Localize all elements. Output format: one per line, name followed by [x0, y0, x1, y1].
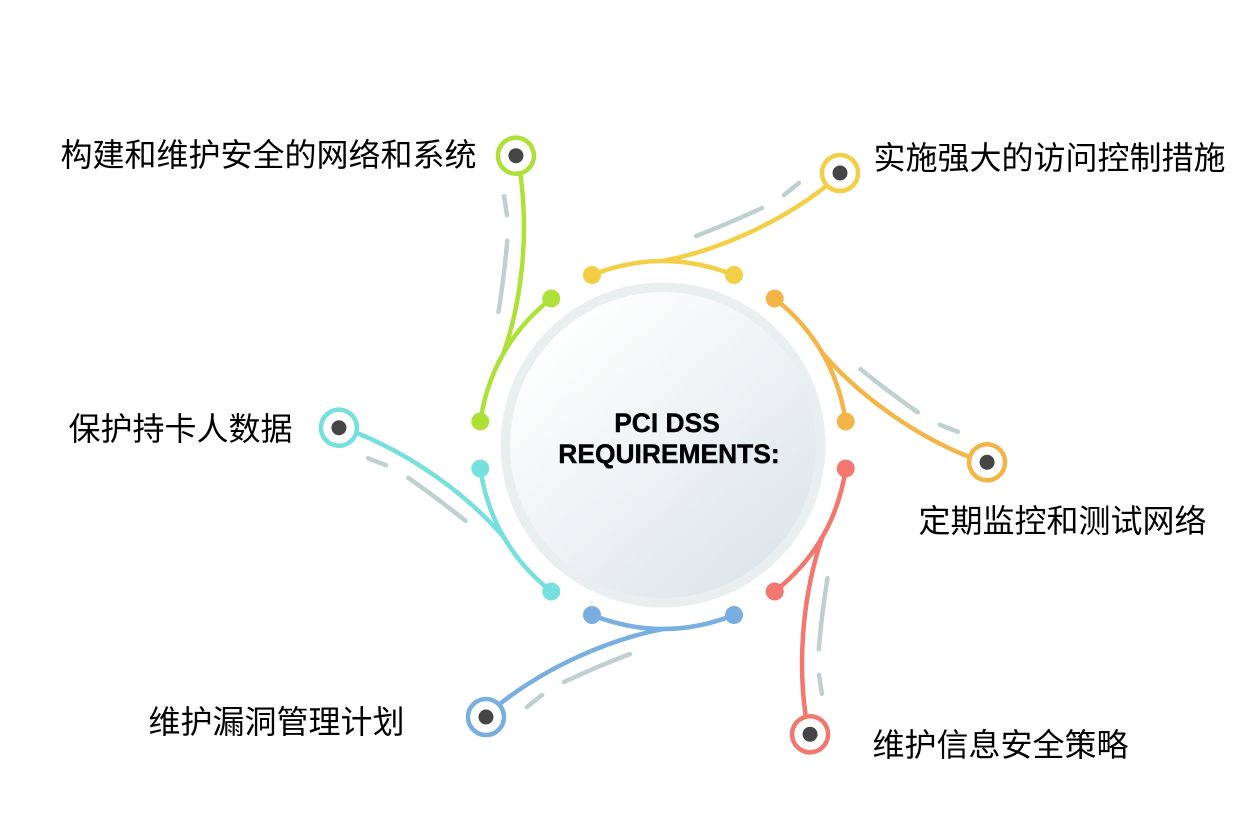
label: blue: 维护漏洞管理计划 [148, 704, 405, 740]
label: yellow: 实施强大的访问控制措施 [874, 140, 1226, 176]
center title: REQUIREMENTS: [558, 439, 780, 469]
connector: green [372, 131, 621, 434]
center title [558, 408, 780, 469]
label: red: 维护信息安全策略 [872, 727, 1129, 763]
central circle [500, 282, 826, 608]
connector: teal [314, 357, 564, 659]
label: green: 构建和维护安全的网络和系统 [60, 137, 477, 173]
connector: orange [762, 231, 1012, 533]
connector: blue [468, 606, 743, 735]
center title: PCI DSS [614, 408, 720, 438]
connector: yellow [583, 155, 858, 284]
connector: red [705, 456, 954, 759]
label: orange: 定期监控和测试网络 [918, 503, 1207, 539]
label: teal: 保护持卡人数据 [68, 411, 293, 447]
